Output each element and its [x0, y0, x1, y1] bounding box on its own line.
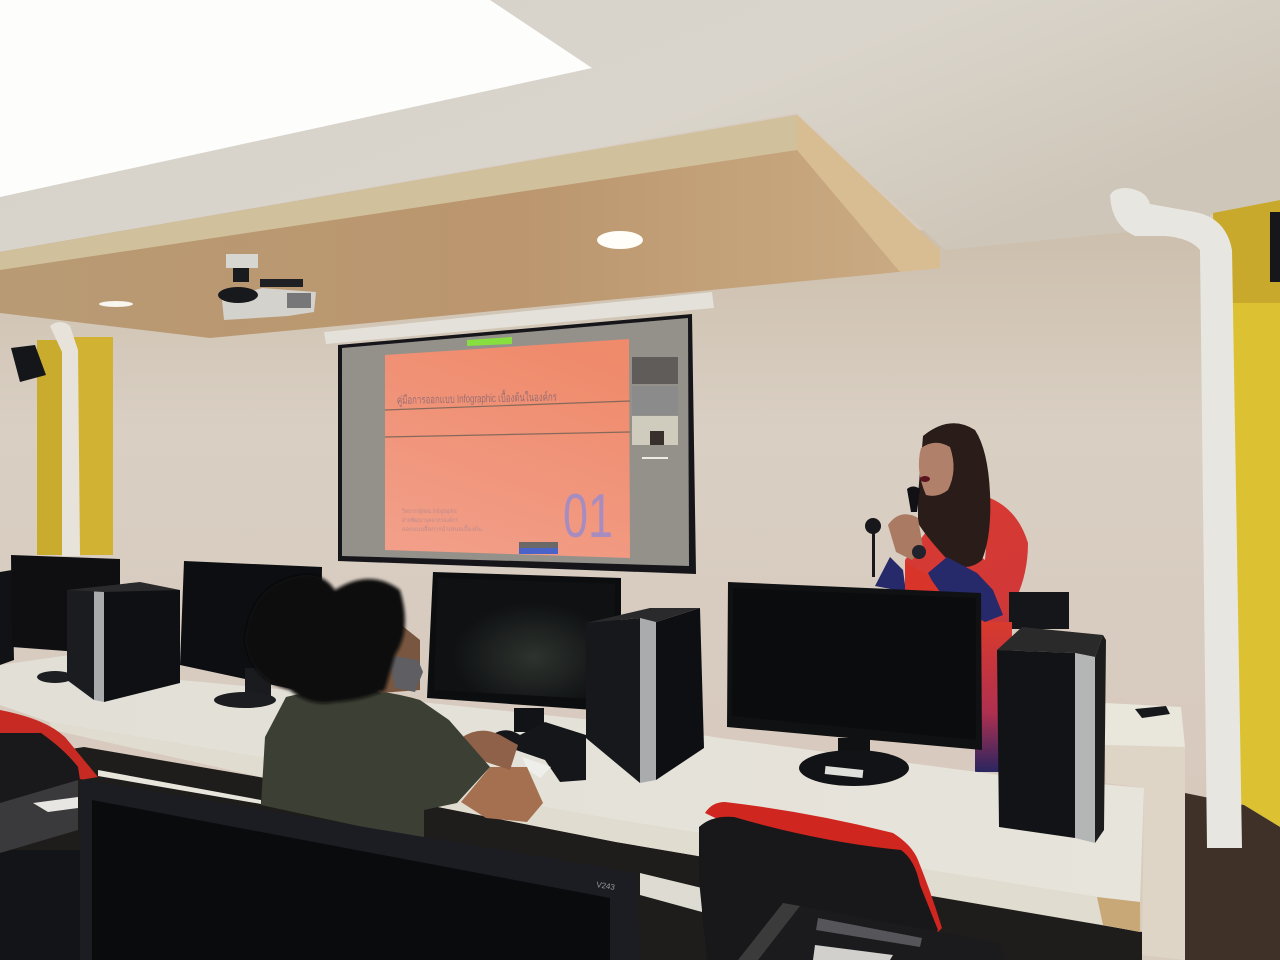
small ceiling light [99, 301, 133, 307]
under-desk shadow [0, 747, 1142, 960]
hair [918, 423, 990, 567]
monitor front-bottom [80, 779, 640, 960]
projector [218, 254, 316, 320]
red chair right [699, 802, 942, 960]
slide presenter lines: ฝ่ายพัฒนาบุคลากรองค์กร [402, 516, 459, 524]
zoom status bar [467, 337, 512, 346]
slide presenter lines: ออกแบบสื่อการนำเสนอเบื้องต้น [402, 523, 482, 533]
pc tower bottom right [738, 903, 1005, 960]
slide number: 01 [563, 482, 613, 551]
wristwatch [912, 545, 926, 559]
microphone [907, 486, 920, 512]
laptop on desk [1009, 592, 1069, 629]
red dress [905, 498, 1028, 772]
slide [385, 339, 630, 558]
ceiling [0, 0, 1280, 252]
pc tower right [997, 627, 1106, 843]
zoom participant videos [632, 357, 678, 459]
hand [461, 731, 518, 770]
monitor centre [427, 572, 621, 732]
wall speaker [11, 345, 46, 382]
monitor far left [11, 555, 120, 683]
screen housing [324, 292, 714, 344]
zoom popup menu [519, 542, 558, 554]
projection screen [338, 314, 696, 574]
left yellow column [37, 322, 113, 556]
face mask [388, 655, 423, 692]
right yellow wall [1213, 200, 1280, 827]
hair [245, 575, 405, 703]
desk edge wood end [1097, 897, 1140, 932]
monitor far left edge [0, 570, 14, 665]
monitor second [180, 561, 322, 708]
pc tower bottom left [0, 780, 80, 960]
black bag on desk [482, 722, 586, 782]
webcam on stand [865, 518, 881, 577]
monitor front-bottom: V243 [596, 880, 616, 892]
desk front edge [49, 722, 1140, 932]
drawer bar right [640, 873, 702, 912]
drawer bar left [98, 770, 261, 804]
seated attendee [245, 575, 543, 840]
presenter [875, 423, 1028, 772]
slide presenter lines: วิทยากรผู้สอน Infographic [401, 508, 457, 515]
face [380, 620, 420, 693]
hands [888, 514, 923, 560]
wooden soffit [0, 115, 940, 338]
skylight [0, 0, 592, 197]
olive shirt [261, 689, 490, 840]
lips [920, 476, 930, 482]
blue sleeves [875, 557, 1003, 622]
notebook [522, 757, 551, 778]
monitor front-right [727, 582, 982, 786]
red bodice [905, 562, 940, 592]
white drain pipe [1110, 188, 1242, 848]
pc tower left [67, 582, 180, 702]
lower dress behind monitor [975, 622, 1012, 772]
main desk surface [0, 655, 1144, 902]
red chair left [0, 710, 98, 805]
wall [0, 230, 1280, 800]
slide presenter lines [401, 508, 482, 533]
slide title: คู่มือการออกแบบ Infographic เบื้องต้นในองค์กร [397, 389, 557, 407]
face [919, 443, 954, 496]
pc tower centre [586, 608, 704, 783]
lectern desk [1105, 703, 1185, 960]
smartphone on desk [1135, 706, 1170, 718]
downlight [597, 231, 643, 249]
floor [1185, 793, 1280, 960]
arm [461, 767, 543, 822]
